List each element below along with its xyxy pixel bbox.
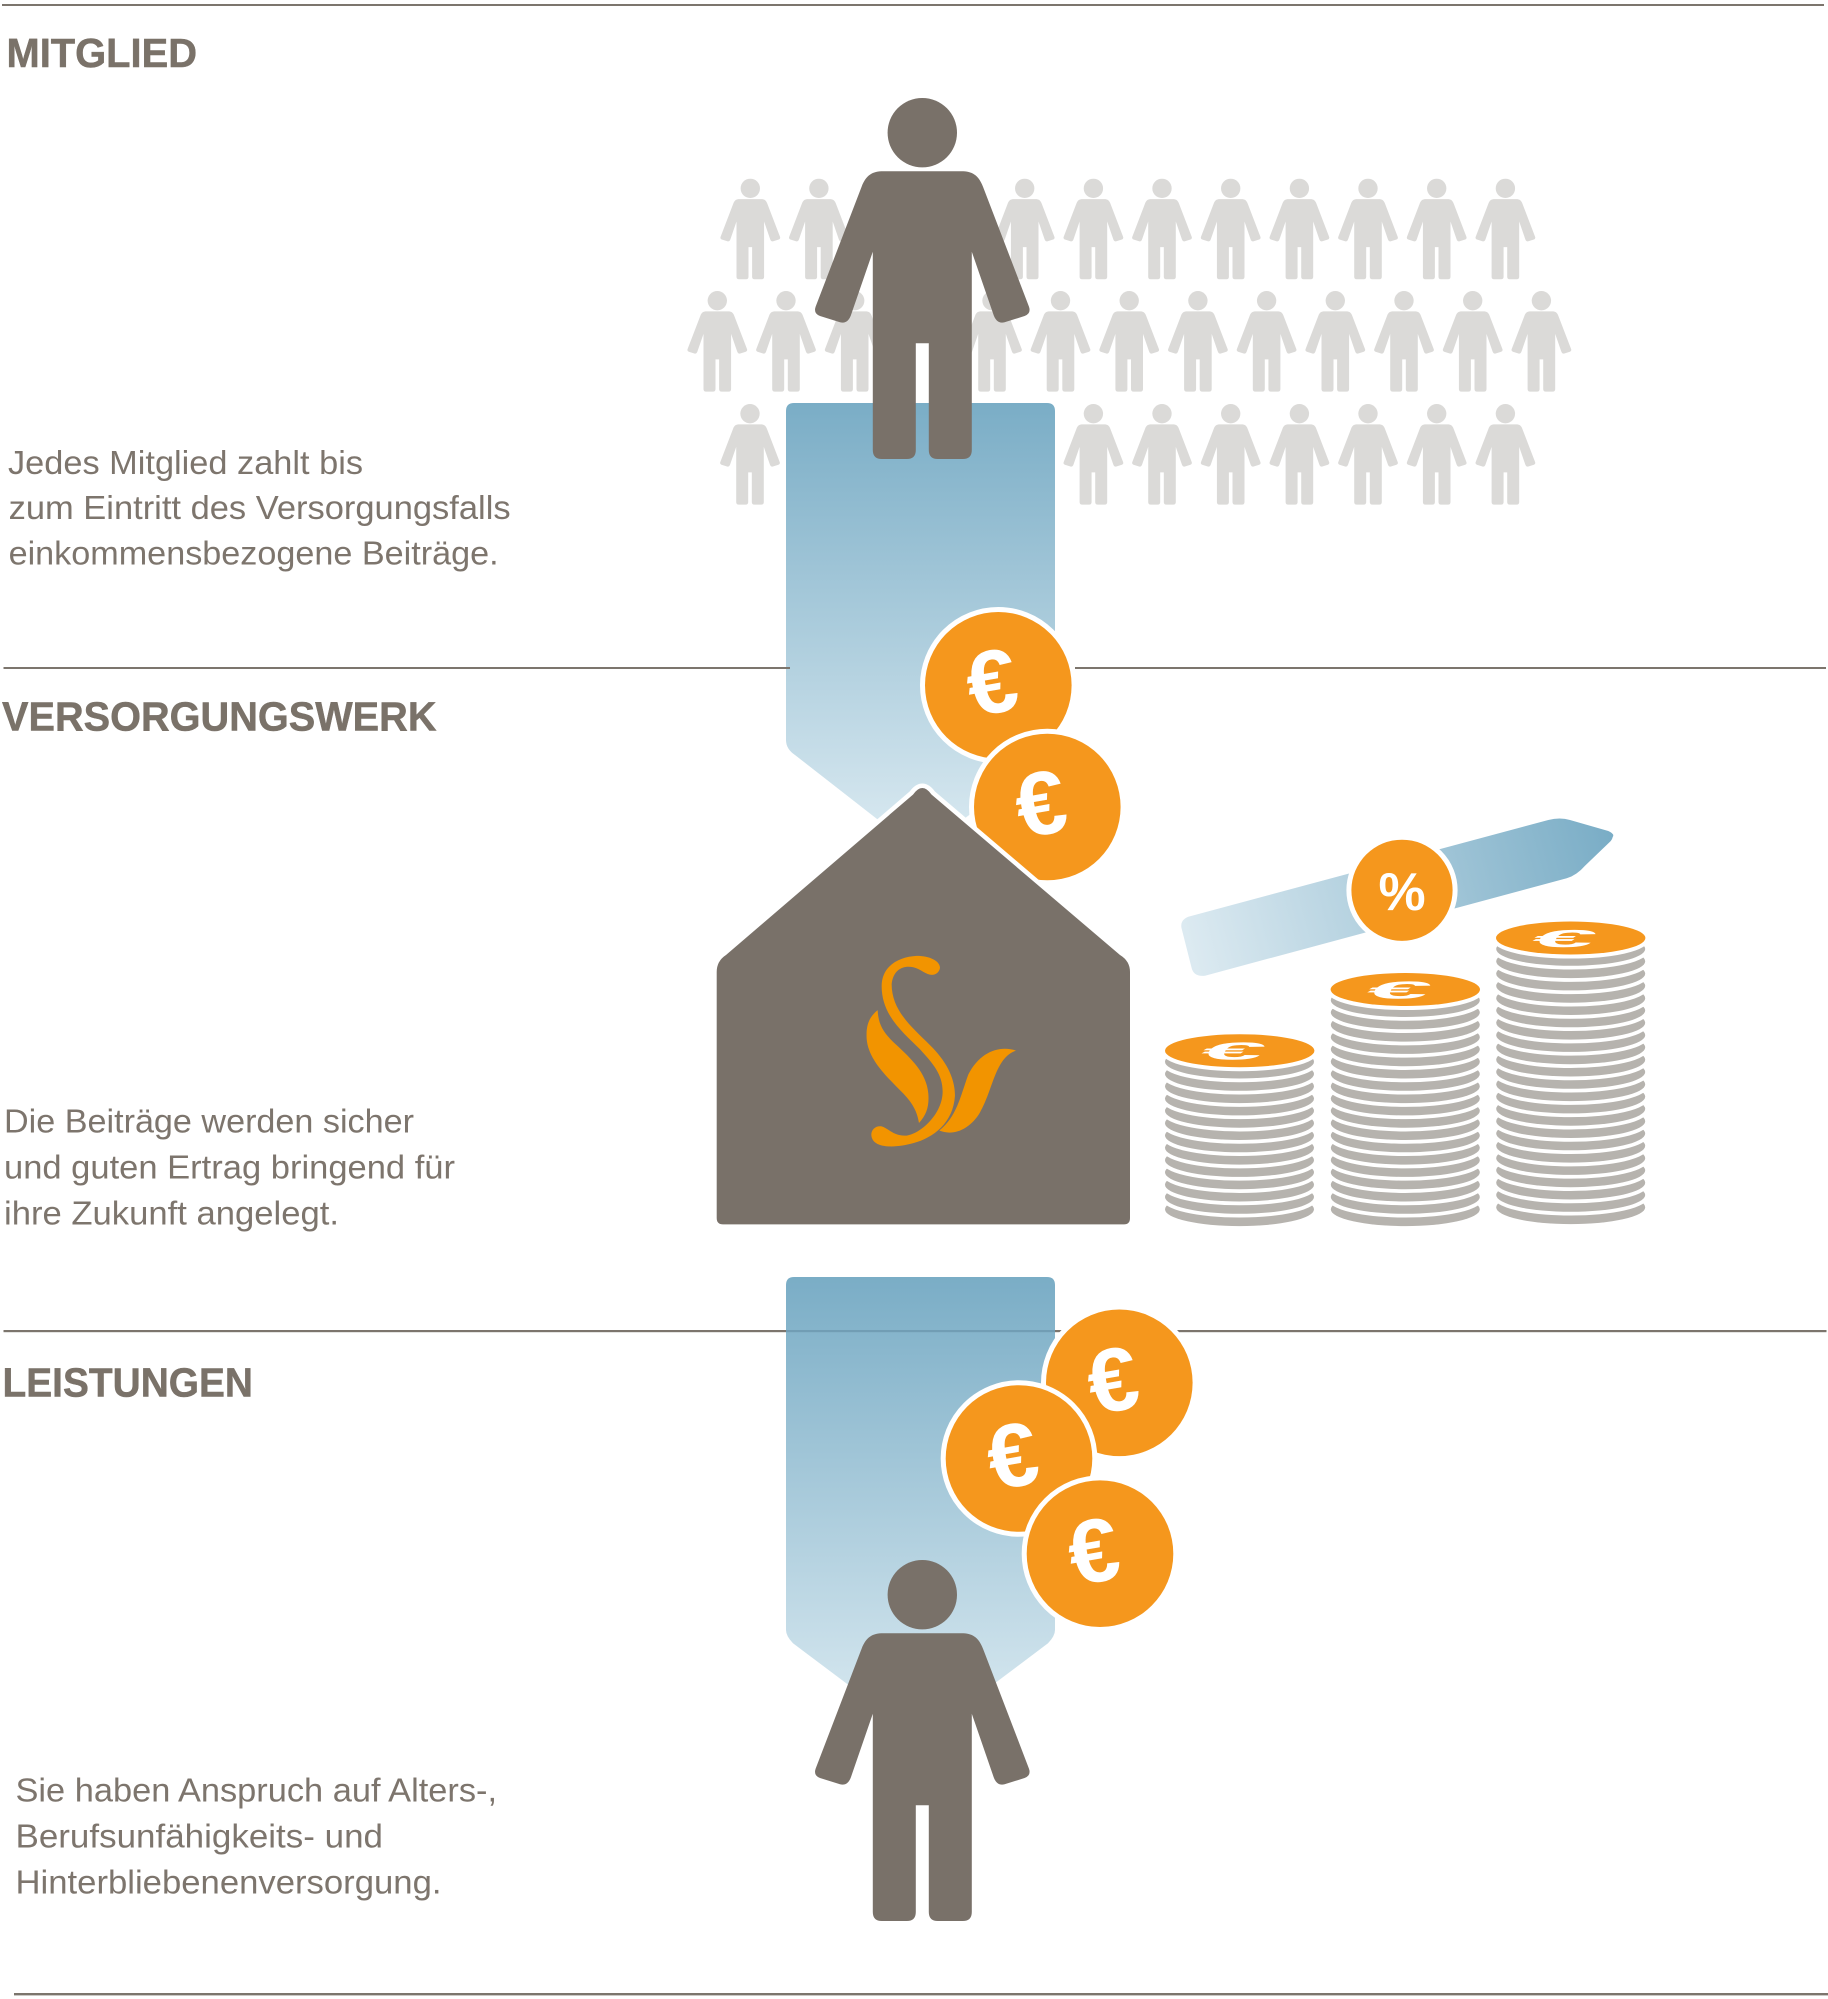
text block: Versorgungswerk description: ihre Zukunft angelegt. bbox=[4, 1196, 339, 1233]
text block: Versorgungswerk description: Die Beiträge werden sicher bbox=[4, 1103, 414, 1140]
heading: Mitglied: MITGLIED bbox=[6, 30, 197, 76]
coin: euro lower bbox=[1027, 1480, 1173, 1627]
heading: Versorgungswerk: VERSORGUNGSWERK bbox=[2, 694, 437, 740]
text block: Versorgungswerk description: und guten Ertrag bringend für bbox=[4, 1150, 455, 1187]
coin: euro lower: € bbox=[1008, 751, 1074, 858]
icon: member figure bbox=[815, 98, 1030, 459]
coin stack: small bbox=[1165, 1034, 1314, 1226]
text block: Versorgungswerk description bbox=[4, 1103, 455, 1233]
coin stack: small: € bbox=[1194, 1038, 1273, 1065]
coin: percent: % bbox=[1378, 863, 1426, 922]
text block: Mitglied description: einkommensbezogene Beiträge. bbox=[9, 536, 499, 572]
coin stack: medium bbox=[1331, 973, 1480, 1226]
arrow: interest rising bbox=[1181, 818, 1613, 976]
line segment over arrow edge bbox=[786, 667, 790, 669]
coin: euro upper bbox=[925, 612, 1072, 759]
line seen through arrow bbox=[786, 1330, 1055, 1332]
text block: Mitglied description: Jedes Mitglied zahlt bis bbox=[8, 445, 363, 482]
text block: Mitglied description bbox=[8, 445, 511, 572]
text block: Leistungen description: Berufsunfähigkeits- und bbox=[16, 1818, 383, 1855]
coin: euro middle bbox=[946, 1385, 1092, 1532]
text block: Leistungen description: Sie haben Anspruch auf Alters-, bbox=[16, 1773, 497, 1810]
house: Versorgungswerk bbox=[717, 788, 1130, 1224]
coin stack: large: € bbox=[1525, 925, 1604, 952]
coin: percent bbox=[1351, 840, 1453, 941]
text block: Mitglied description: zum Eintritt des Versorgungsfalls bbox=[9, 490, 511, 527]
icon: orange S logo bbox=[867, 956, 1016, 1146]
coin stack: large bbox=[1496, 922, 1645, 1224]
coin: euro lower bbox=[974, 734, 1121, 880]
coin stack: medium: € bbox=[1359, 976, 1438, 1004]
coin: euro upper: € bbox=[959, 629, 1025, 737]
coin: euro middle: € bbox=[979, 1403, 1046, 1510]
crowd of members bbox=[687, 179, 1571, 505]
text block: Leistungen description bbox=[16, 1773, 497, 1901]
heading: Leistungen: LEISTUNGEN bbox=[2, 1360, 253, 1406]
arrow: contributions flowing down bbox=[786, 403, 1055, 853]
arrow: benefits flowing down bbox=[786, 1277, 1055, 1739]
coin: euro right: € bbox=[1080, 1327, 1146, 1435]
icon: recipient figure bbox=[815, 1560, 1030, 1921]
text block: Leistungen description: Hinterbliebenenversorgung. bbox=[16, 1864, 441, 1901]
coin: euro lower: € bbox=[1060, 1498, 1127, 1606]
coin: euro right bbox=[1046, 1310, 1193, 1456]
